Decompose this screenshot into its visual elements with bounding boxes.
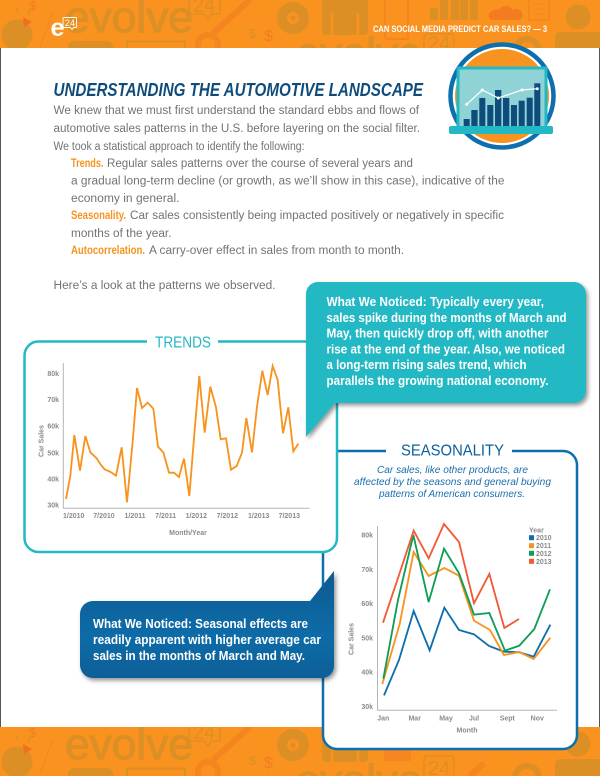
callout: seasonality what we noticed: What We Noticed: Seasonal effects are xyxy=(93,616,308,631)
line chart: trends: 1/2013 xyxy=(248,513,270,520)
line chart: seasonality: 70k xyxy=(361,567,373,574)
list: trends, seasonality, autocorrelation: Regular sales patterns over the course of several years and xyxy=(107,158,413,170)
line chart: seasonality: 40k xyxy=(361,670,373,676)
seasonality description: patterns of American consumers. xyxy=(378,488,525,500)
line chart: seasonality: Sept xyxy=(500,716,516,722)
callout: seasonality what we noticed xyxy=(80,571,334,678)
line chart: trends: 7/2012 xyxy=(217,513,238,520)
header band xyxy=(0,0,600,78)
icon: laptop with bar chart in circle xyxy=(449,44,554,148)
panel: trends xyxy=(24,334,337,552)
line chart: seasonality: 80k xyxy=(361,532,373,540)
callout: trends what we noticed: sales spike during the months of March and xyxy=(326,310,567,325)
line chart: seasonality: Month xyxy=(456,728,478,734)
legend: 2012 xyxy=(536,551,552,558)
header band: 24 xyxy=(428,33,450,55)
header band: evolve xyxy=(296,29,422,78)
legend: 2011 xyxy=(536,543,551,550)
legend: 2010 xyxy=(536,535,552,542)
header band: $ xyxy=(264,28,273,45)
line chart: trends: 1/2012 xyxy=(186,513,207,520)
list: trends, seasonality, autocorrelation: Seasonality. xyxy=(71,210,126,222)
callout: seasonality what we noticed: readily apparent with higher average car xyxy=(93,632,321,647)
line chart: trends xyxy=(38,363,310,537)
panel: seasonality xyxy=(323,442,577,749)
footer band: evolve xyxy=(65,720,193,769)
list: trends, seasonality, autocorrelation: a gradual long-term decline (or growth, as we’ll show in this case), indicative of the xyxy=(71,176,504,188)
logo: e24 xyxy=(50,14,76,42)
callout: trends what we noticed: a long-term rising sales trend, which xyxy=(326,357,527,372)
callout: seasonality what we noticed: sales in the months of March and May. xyxy=(93,648,305,663)
line chart: trends: 30k xyxy=(47,502,59,510)
legend xyxy=(529,528,552,566)
line chart: trends: 7/2013 xyxy=(279,513,300,520)
logo: e24: 24 xyxy=(65,18,75,28)
header title and page number: CAN SOCIAL MEDIA PREDICT CAR SALES? — 3 xyxy=(373,24,547,34)
callout: trends what we noticed xyxy=(306,282,586,437)
seasonality description: affected by the seasons and general buying xyxy=(354,476,551,488)
text: lead-in: Here’s a look at the patterns we observed. xyxy=(54,280,276,292)
list: trends, seasonality, autocorrelation: months of the year. xyxy=(71,228,172,240)
list: trends, seasonality, autocorrelation xyxy=(71,158,504,257)
line chart: trends: 1/2010 xyxy=(63,513,85,520)
footer band: $ xyxy=(249,753,257,768)
line chart: trends: 80k xyxy=(47,371,59,378)
callout: trends what we noticed: rise at the end of the year. Also, we noticed xyxy=(326,342,565,356)
line chart: seasonality: May xyxy=(439,716,453,722)
footer band: $ xyxy=(29,725,37,740)
line chart: seasonality: 50k xyxy=(361,636,373,642)
line chart: seasonality: Nov xyxy=(531,716,544,722)
line chart: seasonality: Car Sales xyxy=(348,623,356,655)
list: trends, seasonality, autocorrelation: Autocorrelation. xyxy=(71,245,145,257)
line chart: trends: 1/2011 xyxy=(124,513,146,520)
callout: trends what we noticed: May, then quickly drop off, with another xyxy=(326,326,548,340)
line chart: seasonality: Mar xyxy=(408,716,421,722)
seasonality heading: SEASONALITY xyxy=(401,442,504,460)
intro text block xyxy=(54,105,420,153)
line chart: trends: Month/Year xyxy=(169,530,207,537)
line chart: trends: 50k xyxy=(47,450,59,458)
intro text block: We took a statistical approach to identify the following: xyxy=(54,141,304,153)
line chart: seasonality: 60k xyxy=(361,601,373,608)
seasonality description: Car sales, like other products, are xyxy=(377,464,528,476)
list: trends, seasonality, autocorrelation: A carry-over effect in sales from month to month. xyxy=(149,245,404,257)
seasonality description xyxy=(354,464,551,500)
callout: trends what we noticed: What We Noticed: Typically every year, xyxy=(326,294,544,309)
footer band: 24 xyxy=(193,722,215,744)
intro text block: We knew that we must first understand the standard ebbs and flows of xyxy=(54,105,420,117)
line chart: trends: 7/2011 xyxy=(155,513,176,520)
line chart: seasonality: Jul xyxy=(469,716,479,722)
legend: Year xyxy=(529,528,544,534)
line chart: seasonality xyxy=(348,524,557,734)
footer band xyxy=(0,720,600,776)
line chart: trends: 70k xyxy=(47,397,59,404)
line chart: seasonality: 30k xyxy=(361,704,373,711)
intro text block: automotive sales patterns in the U.S. before layering on the social filter. xyxy=(54,123,420,135)
line chart: trends: 40k xyxy=(47,476,59,484)
footer band: $ xyxy=(264,755,273,772)
list: trends, seasonality, autocorrelation: Trends. xyxy=(71,158,104,170)
line chart: trends: 60k xyxy=(47,424,59,430)
line chart: trends: Car Sales xyxy=(38,425,46,457)
line chart: seasonality: Jan xyxy=(377,716,389,722)
logo: e24: e xyxy=(50,14,65,42)
legend: 2013 xyxy=(536,559,552,566)
list: trends, seasonality, autocorrelation: Car sales consistently being impacted positively or negatively in specific xyxy=(130,210,504,222)
heading: UNDERSTANDING THE AUTOMOTIVE LANDSCAPE xyxy=(54,80,424,100)
list: trends, seasonality, autocorrelation: economy in general. xyxy=(71,193,180,205)
trends heading: TRENDS xyxy=(155,334,211,352)
header band: $ xyxy=(249,26,257,41)
line chart: trends: 7/2010 xyxy=(93,513,115,520)
callout: trends what we noticed: parallels the growing national economy. xyxy=(326,373,548,388)
